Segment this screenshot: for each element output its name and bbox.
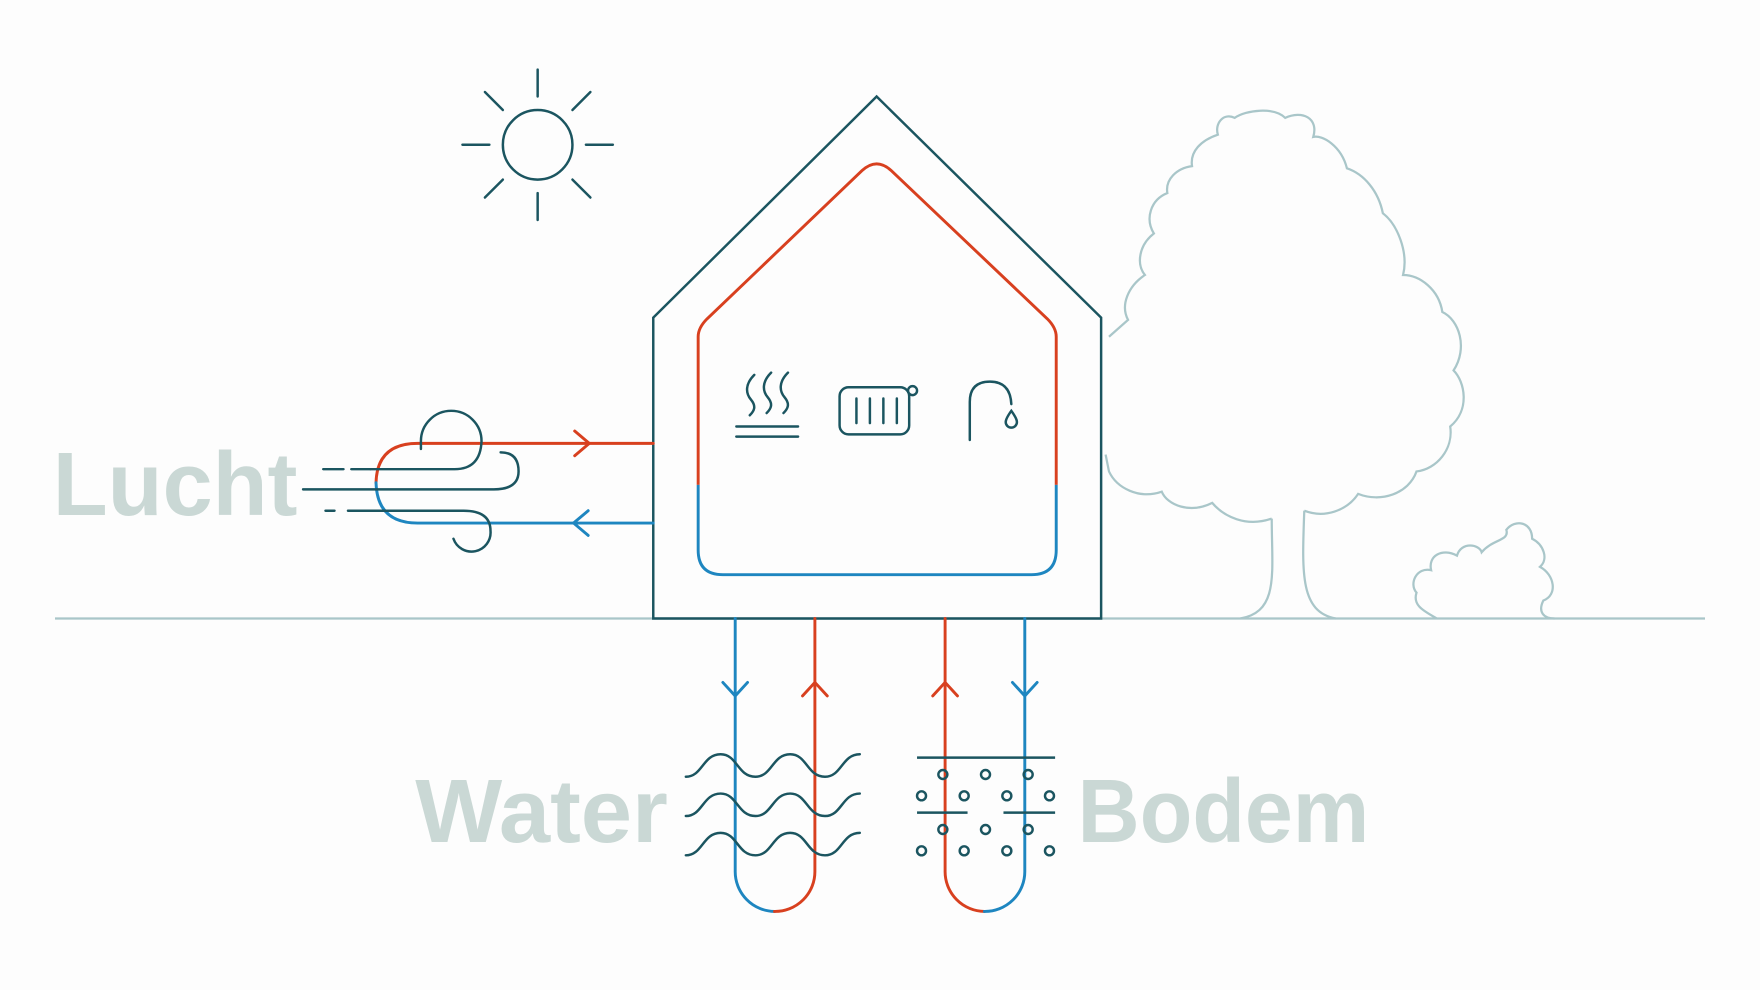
label: Bodem: Bodem <box>1078 762 1369 862</box>
label: Water: Water <box>415 762 668 862</box>
air loop with arrows <box>376 431 653 535</box>
ground line <box>55 617 1705 619</box>
tree <box>1106 111 1464 618</box>
house outline <box>653 97 1101 618</box>
house heating loop <box>698 164 1056 575</box>
sun <box>462 70 613 220</box>
icon: radiator <box>840 386 917 434</box>
icon: tap with drop <box>970 382 1017 440</box>
label: Lucht: Lucht <box>53 435 297 535</box>
water pipe loop <box>723 618 827 911</box>
icon: wind <box>303 411 519 552</box>
icon: floor heating <box>736 373 798 437</box>
icon: water waves <box>686 754 860 855</box>
ground pipe loop <box>933 618 1037 911</box>
bush <box>1413 523 1555 618</box>
icon: soil layers <box>917 758 1055 855</box>
